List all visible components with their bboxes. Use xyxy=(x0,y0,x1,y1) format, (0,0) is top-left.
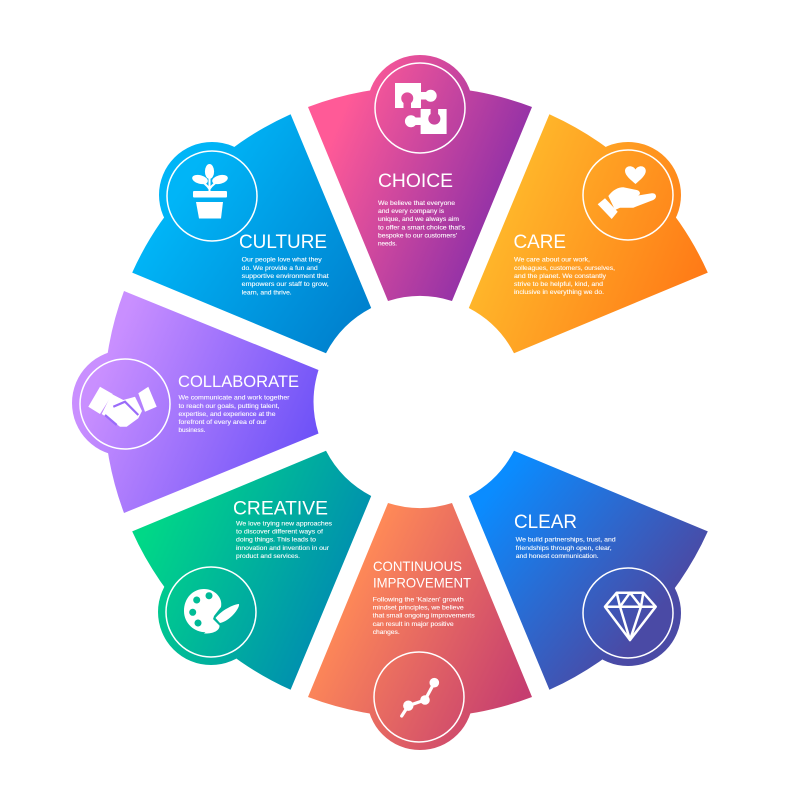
text: culture description xyxy=(242,257,329,296)
text: collaborate description: forefront of every area of our xyxy=(178,419,267,426)
text: choice description xyxy=(378,200,466,248)
heading: continuous improvement: CONTINUOUS xyxy=(373,558,462,574)
text: continuous improvement description: can result in major positive xyxy=(373,621,454,628)
icon: diamond xyxy=(583,568,673,658)
text: continuous improvement description: mindset principles, we believe xyxy=(373,604,464,612)
text: care description: We care about our work, xyxy=(514,257,590,264)
icon: growth line xyxy=(374,652,464,742)
text: culture description: do. We provide a fun and xyxy=(242,265,318,272)
text: creative description: innovation and invention in our xyxy=(236,545,330,552)
heading: continuous improvement: IMPROVEMENT xyxy=(373,575,471,591)
heading: collaborate: COLLABORATE xyxy=(178,372,299,391)
wedge shape: care xyxy=(469,114,708,353)
text: clear description: We build partnerships, trust, and xyxy=(516,537,616,544)
text: continuous improvement description: Following the 'Kaizen' growth xyxy=(373,596,464,603)
text: continuous improvement description: that small ongoing improvements xyxy=(373,613,475,620)
panel: clear xyxy=(469,451,708,690)
panel: care xyxy=(469,114,708,353)
text: care description: inclusive in everything we do. xyxy=(514,289,604,296)
wedge shape: culture xyxy=(132,114,371,353)
text: choice description: to offer a smart choice that's xyxy=(378,224,466,231)
text: choice description: bespoke to our customers' xyxy=(378,232,457,239)
wedge shape: collaborate xyxy=(72,291,318,513)
text: collaborate description: We communicate and work together xyxy=(178,395,290,402)
panel: creative xyxy=(132,451,371,690)
text: clear description: and honest communication. xyxy=(516,553,599,560)
wedge shape: creative xyxy=(132,451,371,690)
text: creative description: doing things. This leads to xyxy=(236,537,316,544)
heading: choice: CHOICE xyxy=(378,170,453,192)
panel: culture xyxy=(132,114,371,353)
icon: potted plant xyxy=(167,151,257,241)
text: care description: colleagues, customers, ourselves, xyxy=(514,265,615,272)
text: creative description: to discover different ways of xyxy=(236,528,323,536)
heading: care: CARE xyxy=(514,231,566,253)
wedge shape: choice xyxy=(308,55,532,301)
text: care description xyxy=(514,257,615,296)
text: choice description: unique, and we always aim xyxy=(378,216,459,223)
text: clear description xyxy=(516,537,616,560)
heading: clear: CLEAR xyxy=(514,511,577,533)
text: collaborate description xyxy=(178,395,290,434)
wedge shape: clear xyxy=(469,451,708,690)
text: culture description: Our people love what they xyxy=(242,257,322,264)
text: culture description: learn, and thrive. xyxy=(242,289,292,296)
icon: hand holding heart xyxy=(583,150,673,240)
text: collaborate description: business. xyxy=(178,427,206,434)
text: creative description xyxy=(236,520,333,560)
panel: continuous improvement xyxy=(308,503,532,750)
text: continuous improvement description xyxy=(373,596,475,636)
text: culture description: empowers our staff to grow, xyxy=(242,281,329,288)
text: choice description: and every company is xyxy=(378,208,445,215)
icon: handshake xyxy=(80,359,170,449)
text: culture description: supportive environment that xyxy=(242,273,329,280)
heading: culture: CULTURE xyxy=(239,231,327,253)
text: care description: and the planet. We constantly xyxy=(514,273,607,280)
panel: collaborate xyxy=(72,291,318,513)
text: choice description: needs. xyxy=(378,240,397,248)
wedge shape: continuous improvement xyxy=(308,503,532,750)
text: collaborate description: to reach our goals, putting talent, xyxy=(178,403,280,410)
text: collaborate description: expertise, and experience at the xyxy=(178,411,276,418)
text: continuous improvement description: changes. xyxy=(373,629,400,636)
text: creative description: We love trying new approaches xyxy=(236,520,333,527)
icon: puzzle pieces xyxy=(375,63,465,153)
heading: continuous improvement xyxy=(373,558,471,591)
text: choice description: We believe that everyone xyxy=(378,200,455,207)
text: creative description: product and services. xyxy=(236,553,300,560)
panel: choice xyxy=(308,55,532,301)
text: care description: strive to be helpful, kind, and xyxy=(514,281,603,288)
icon: palette and brush xyxy=(166,567,256,657)
text: clear description: friendships through open, clear, xyxy=(516,545,612,552)
heading: creative: CREATIVE xyxy=(233,498,328,520)
